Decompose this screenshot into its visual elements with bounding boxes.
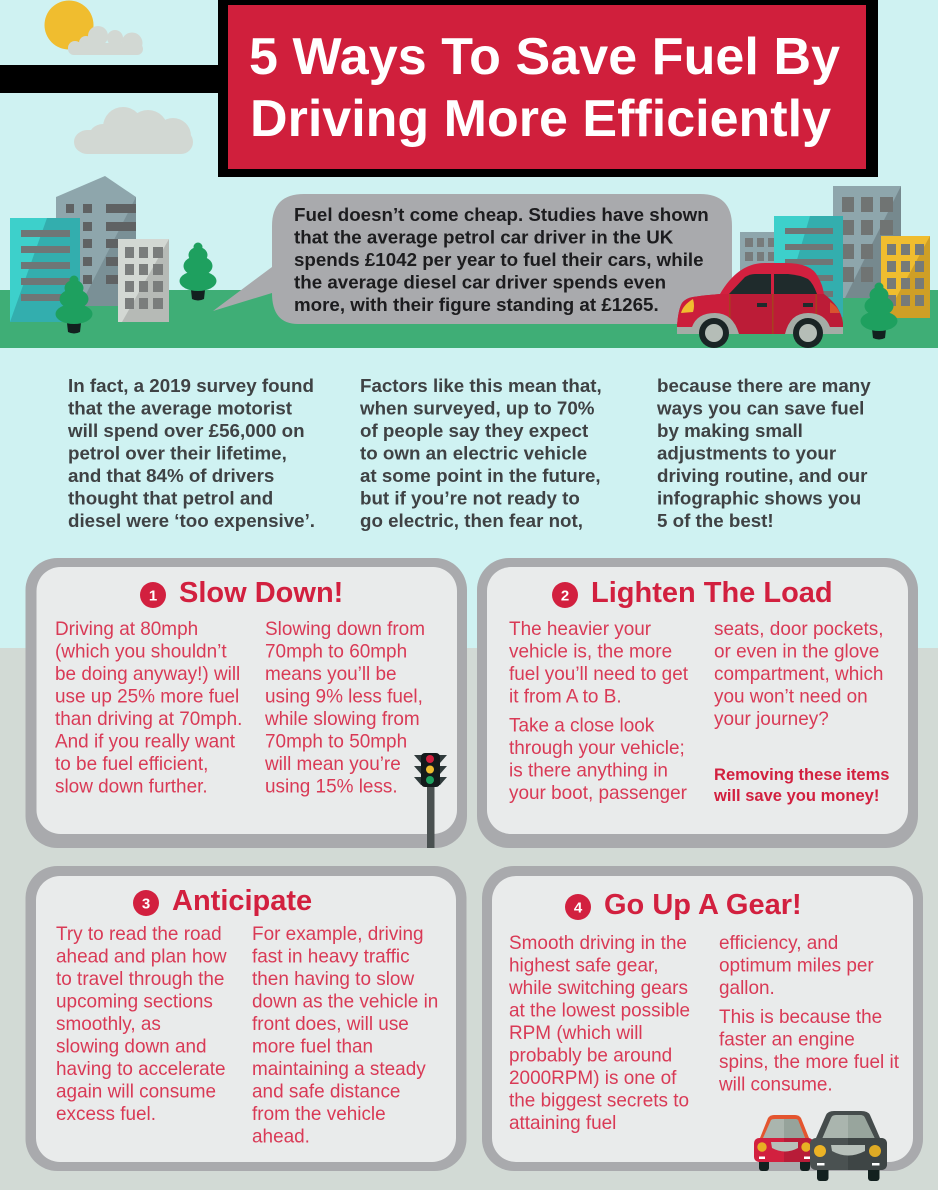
text: lighten the load left: through your vehicle;	[509, 738, 685, 759]
intro text column 3: adjustments to your	[657, 442, 837, 464]
text: anticipate right: then having to slow	[252, 969, 414, 990]
title banner	[218, 0, 878, 177]
text: slow down right: 70mph to 60mph	[265, 642, 407, 662]
tree 3	[860, 282, 898, 340]
text: lighten the load right: or even in the glove	[714, 642, 879, 662]
right city buildings	[740, 186, 930, 318]
intro text column 3: 5 of the best!	[657, 510, 774, 531]
text: go up a gear left: while switching gears	[508, 978, 688, 999]
text: anticipate left: smoothly, as	[56, 1014, 161, 1035]
text: anticipate right: ahead.	[252, 1126, 310, 1148]
panel: lighten the load	[477, 558, 918, 848]
text: slow down left: slow down further.	[55, 776, 208, 798]
speech bubble: more, with their figure standing at £1265.	[294, 294, 659, 315]
title banner: Driving More Efficiently	[250, 90, 831, 148]
text: anticipate left: excess fuel.	[56, 1104, 156, 1125]
text: anticipate left: to travel through the	[56, 969, 224, 990]
callout: removing items: Removing these items	[714, 765, 889, 784]
icon: large cloud	[74, 107, 193, 154]
intro text column 1: petrol over their lifetime,	[68, 442, 287, 464]
text: lighten the load left: vehicle is, the more	[509, 642, 672, 662]
text: slow down left: than driving at 70mph.	[55, 709, 242, 730]
black banner arm	[0, 65, 225, 93]
callout: removing items: will save you money!	[713, 786, 879, 805]
intro text column 3: infographic shows you	[657, 488, 861, 508]
panel: anticipate	[26, 866, 466, 1171]
intro text column 2: Factors like this mean that,	[360, 375, 602, 396]
text: slow down right: Slowing down from	[265, 619, 425, 640]
text: anticipate right: from the vehicle	[252, 1104, 386, 1125]
text: lighten the load left: The heavier your	[509, 619, 651, 640]
text: go up a gear left: probably be around	[509, 1046, 672, 1066]
text: go up a gear right: spins, the more fuel it	[719, 1052, 900, 1073]
text: lighten the load left: fuel you’ll need to get	[509, 664, 689, 685]
heading: slow down: 1	[149, 588, 157, 604]
text: anticipate right: more fuel than	[252, 1036, 373, 1058]
text: slow down left: use up 25% more fuel	[55, 686, 239, 708]
text: go up a gear left: Smooth driving in the	[509, 933, 687, 954]
speech bubble	[213, 194, 732, 324]
intro text column 3: driving routine, and our	[657, 465, 868, 486]
text: go up a gear left: 2000RPM) is one of	[509, 1068, 677, 1089]
intro text column 3: by making small	[657, 420, 803, 441]
text: go up a gear left: at the lowest possible	[509, 1000, 690, 1022]
text: go up a gear right: faster an engine	[719, 1030, 855, 1050]
heading: go up a gear: 4	[574, 900, 583, 916]
text: go up a gear right: efficiency, and	[719, 933, 838, 954]
heading: go up a gear: Go Up A Gear!	[604, 889, 802, 921]
icon: small cloud	[68, 26, 143, 55]
text: anticipate right: front does, will use	[252, 1014, 409, 1035]
text: go up a gear right: gallon.	[719, 978, 775, 999]
text: lighten the load right: your journey?	[714, 709, 829, 730]
intro text column 2: but if you’re not ready to	[360, 488, 580, 508]
text: lighten the load left: your boot, passenger	[509, 783, 687, 804]
speech bubble: Fuel doesn’t come cheap. Studies have shown	[294, 204, 709, 225]
text: lighten the load left: Take a close look	[509, 716, 655, 736]
icon: two cars	[754, 1111, 887, 1181]
text: slow down right: using 15% less.	[265, 776, 398, 798]
text: anticipate left: Try to read the road	[56, 924, 222, 945]
text: go up a gear left: the biggest secrets to	[509, 1090, 689, 1112]
text: slow down left: And if you really want	[55, 732, 236, 752]
speech bubble: that the average petrol car driver in the UK	[294, 226, 674, 248]
intro text column 3: because there are many	[657, 375, 871, 396]
title banner: 5 Ways To Save Fuel By	[249, 28, 840, 86]
heading: anticipate: Anticipate	[172, 885, 312, 917]
intro text column 2: to own an electric vehicle	[360, 442, 587, 464]
text: anticipate left: again will consume	[56, 1082, 216, 1102]
panel: slow down	[26, 558, 467, 848]
text: anticipate right: For example, driving	[252, 924, 424, 945]
text: slow down left: to be fuel efficient,	[55, 754, 208, 775]
text: slow down right: 70mph to 50mph	[265, 732, 407, 752]
intro text column 1: diesel were ‘too expensive’.	[68, 510, 315, 531]
heading: slow down: Slow Down!	[179, 577, 343, 609]
text: go up a gear left: highest safe gear,	[509, 956, 659, 976]
speech bubble: the average diesel car driver spends even	[294, 272, 666, 292]
text: slow down left: (which you shouldn’t	[55, 642, 227, 662]
text: slow down right: means you’ll be	[265, 664, 397, 685]
text: anticipate left: slowing down and	[56, 1036, 207, 1058]
text: anticipate right: maintaining a steady	[252, 1059, 426, 1080]
text: go up a gear left: attaining fuel	[509, 1113, 616, 1134]
text: anticipate left: ahead and plan how	[56, 946, 227, 968]
tree 1	[56, 276, 92, 334]
intro text column 2: of people say they expect	[360, 420, 589, 441]
text: anticipate right: down as the vehicle in	[252, 992, 438, 1012]
icon: traffic light	[414, 753, 447, 848]
heading: lighten the load: 2	[561, 588, 569, 604]
left city buildings	[10, 176, 169, 322]
text: slow down right: using 9% less fuel,	[265, 686, 423, 708]
text: slow down left: Driving at 80mph	[55, 619, 198, 640]
speech bubble: spends £1042 per year to fuel their cars, while	[294, 249, 704, 270]
text: slow down left: be doing anyway!) will	[55, 664, 240, 685]
text: slow down right: will mean you’re	[264, 754, 401, 775]
intro text column 2: go electric, then fear not,	[360, 510, 583, 531]
text: lighten the load right: compartment, which	[714, 664, 883, 685]
text: lighten the load right: seats, door pockets,	[714, 619, 883, 640]
heading: anticipate: 3	[142, 896, 150, 912]
text: go up a gear right: This is because the	[719, 1007, 882, 1028]
icon: sun	[44, 0, 94, 50]
text: anticipate right: and safe distance	[252, 1082, 400, 1102]
text: anticipate right: fast in heavy traffic	[252, 946, 410, 968]
intro text column 1: and that 84% of drivers	[68, 465, 274, 486]
text: go up a gear left: RPM (which will	[509, 1023, 643, 1044]
intro text column 1: will spend over £56,000 on	[67, 420, 305, 441]
intro text column 2: when surveyed, up to 70%	[359, 398, 595, 418]
text: go up a gear right: will consume.	[718, 1074, 833, 1096]
text: lighten the load left: it from A to B.	[509, 686, 622, 708]
text: slow down right: while slowing from	[264, 709, 420, 730]
text: anticipate left: having to accelerate	[56, 1059, 226, 1080]
tree 2	[180, 242, 216, 300]
intro text column 3: ways you can save fuel	[656, 398, 864, 418]
text: lighten the load right: you won’t need on	[714, 686, 868, 708]
intro text column 2: at some point in the future,	[360, 465, 601, 486]
heading: lighten the load: Lighten The Load	[591, 577, 833, 609]
intro text column 1: In fact, a 2019 survey found	[68, 375, 314, 396]
text: go up a gear right: optimum miles per	[719, 956, 874, 976]
intro text column 1: thought that petrol and	[68, 488, 273, 508]
icon: red car	[677, 263, 843, 348]
text: lighten the load left: is there anything in	[509, 760, 668, 782]
intro text column 1: that the average motorist	[68, 398, 293, 418]
panel: go up a gear	[482, 866, 923, 1171]
text: anticipate left: upcoming sections	[56, 992, 213, 1012]
